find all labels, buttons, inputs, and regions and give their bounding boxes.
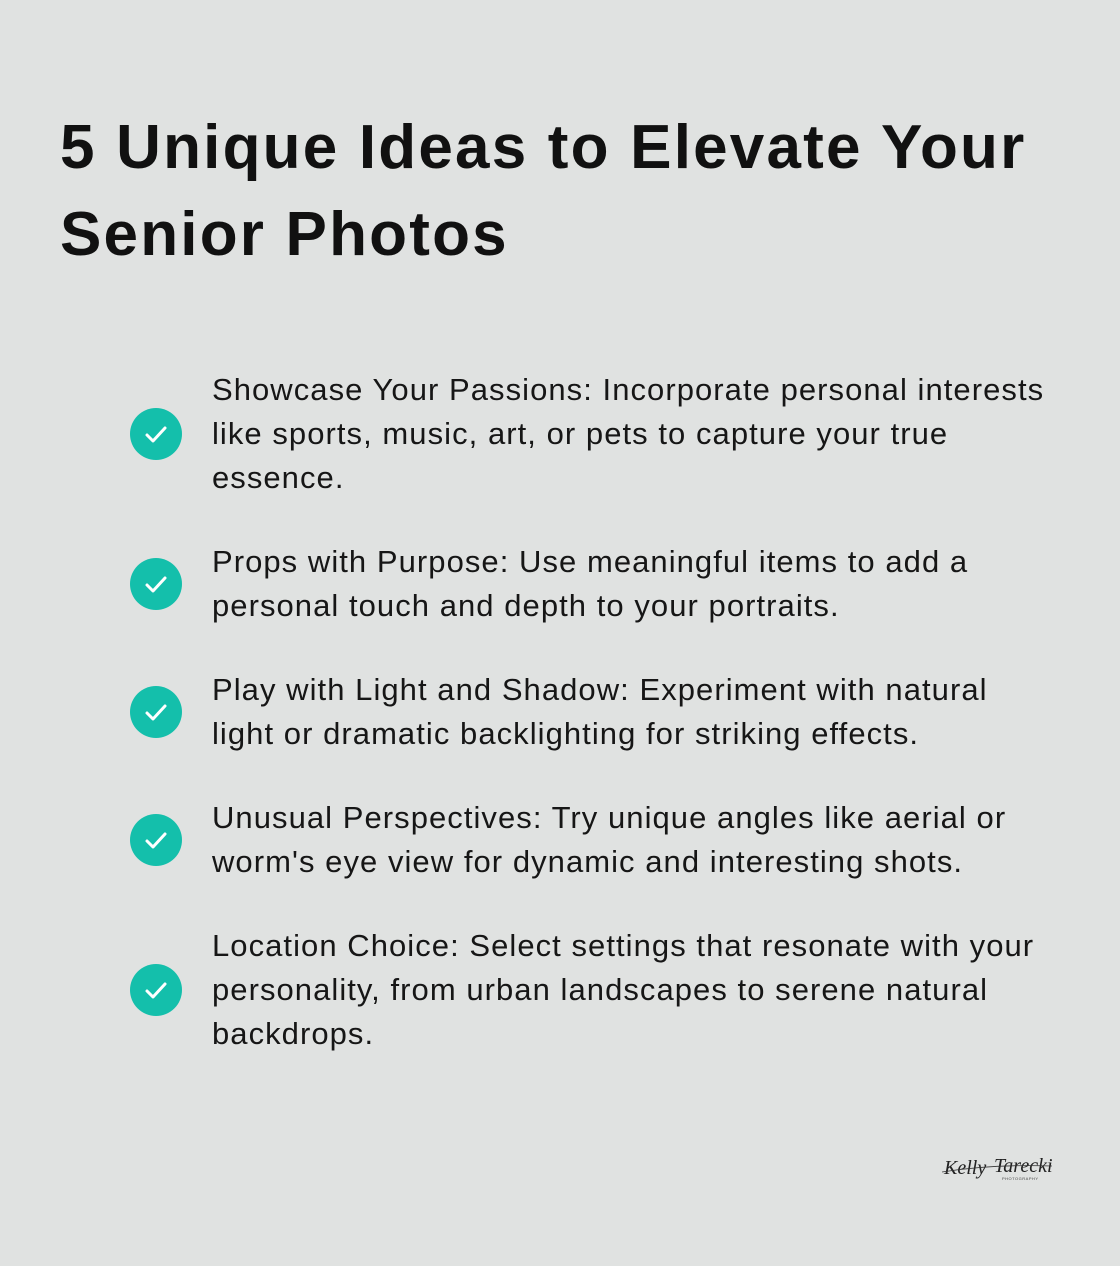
text: Props with Purpose: Use meaningful items to add a bbox=[212, 544, 968, 579]
text: Location Choice: Select settings that resonate with your bbox=[212, 928, 1034, 963]
icon: check bbox=[130, 964, 182, 1016]
icon: check bbox=[130, 558, 182, 610]
text bbox=[212, 544, 968, 623]
item: props bbox=[130, 544, 968, 623]
text: Unusual Perspectives: Try unique angles like aerial or bbox=[212, 800, 1006, 835]
logo: signature bbox=[942, 1155, 1053, 1181]
text bbox=[212, 800, 1006, 879]
item: location bbox=[130, 928, 1034, 1051]
logo: signature: PHOTOGRAPHY bbox=[1002, 1176, 1039, 1181]
item: showcase passions bbox=[130, 372, 1044, 495]
text: Showcase Your Passions: Incorporate personal interests bbox=[212, 372, 1044, 407]
text: personal touch and depth to your portraits. bbox=[212, 588, 840, 623]
icon: check bbox=[130, 408, 182, 460]
text: backdrops. bbox=[212, 1016, 374, 1051]
text bbox=[212, 672, 988, 751]
text bbox=[212, 928, 1034, 1051]
title: Senior Photos bbox=[60, 200, 509, 269]
text bbox=[212, 372, 1044, 495]
text: light or dramatic backlighting for striking effects. bbox=[212, 716, 919, 751]
text: like sports, music, art, or pets to capture your true bbox=[212, 416, 948, 451]
logo: signature: Tarecki bbox=[994, 1155, 1053, 1177]
text: essence. bbox=[212, 460, 344, 495]
item: perspectives bbox=[130, 800, 1006, 879]
title bbox=[60, 113, 1026, 269]
text: personality, from urban landscapes to serene natural bbox=[212, 972, 988, 1007]
icon: check bbox=[130, 686, 182, 738]
logo: signature: Kelly bbox=[943, 1157, 986, 1179]
item: light bbox=[130, 672, 988, 751]
text: worm's eye view for dynamic and interesting shots. bbox=[212, 844, 963, 879]
text: Play with Light and Shadow: Experiment with natural bbox=[212, 672, 988, 707]
title: 5 Unique Ideas to Elevate Your bbox=[60, 113, 1026, 182]
icon: check bbox=[130, 814, 182, 866]
